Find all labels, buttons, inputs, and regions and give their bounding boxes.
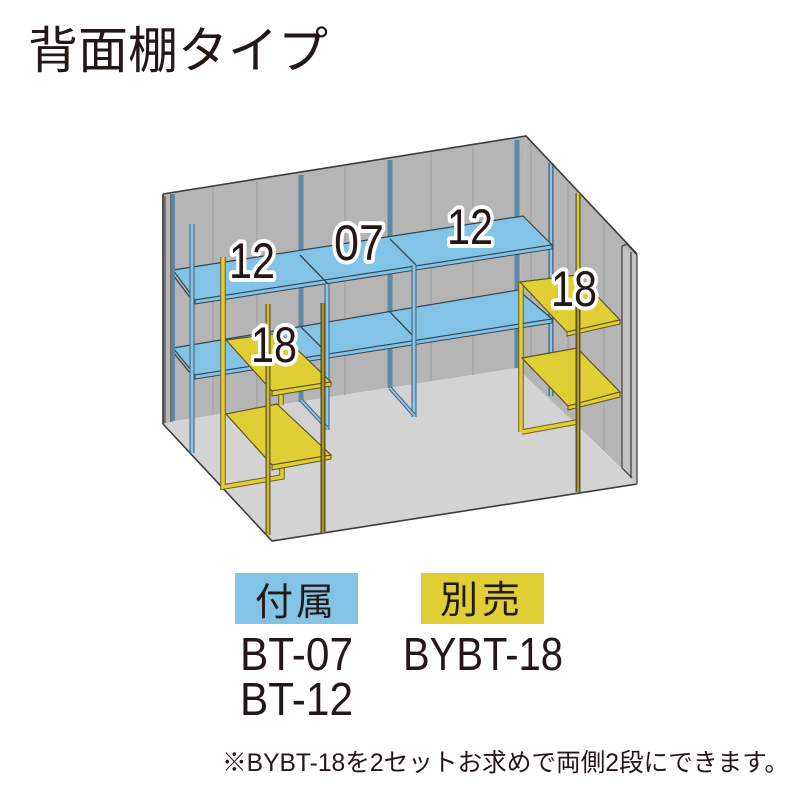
shelf width labels: 18 (551, 261, 597, 317)
right end column (622, 244, 637, 484)
part numbers: included: BT-12 (240, 673, 353, 725)
floor (163, 368, 637, 541)
right wall (517, 136, 637, 484)
title: 背面棚タイプ (28, 23, 328, 79)
back wall posts (301, 140, 551, 402)
shelf width labels: 12 (229, 233, 275, 289)
shelf width labels (229, 199, 597, 373)
legend: included (235, 573, 358, 624)
yellow unit: left (223, 257, 331, 535)
footnote: ※BYBT-18を2セットお求めで両側2段にできます。 (222, 749, 789, 777)
blue shelf: lower (173, 290, 552, 379)
outer outline (163, 136, 637, 541)
back wall (163, 136, 526, 421)
shelf width labels: 18 (251, 317, 297, 373)
left end column (162, 193, 175, 424)
blue front posts and bases (192, 224, 414, 453)
shelf width labels: 07 (334, 215, 384, 271)
legend: included: 付属 (255, 582, 337, 624)
legend: sold separately (421, 573, 544, 624)
yellow unit: right (520, 193, 620, 492)
legend: sold separately: 別売 (440, 580, 524, 622)
part numbers: included (240, 628, 353, 725)
part numbers: included: BT-07 (240, 628, 353, 680)
part number: sold separately: BYBT-18 (403, 628, 563, 680)
storage shed diagram (162, 136, 637, 541)
shelf width labels: 12 (447, 199, 493, 255)
blue shelf: upper (173, 216, 552, 304)
